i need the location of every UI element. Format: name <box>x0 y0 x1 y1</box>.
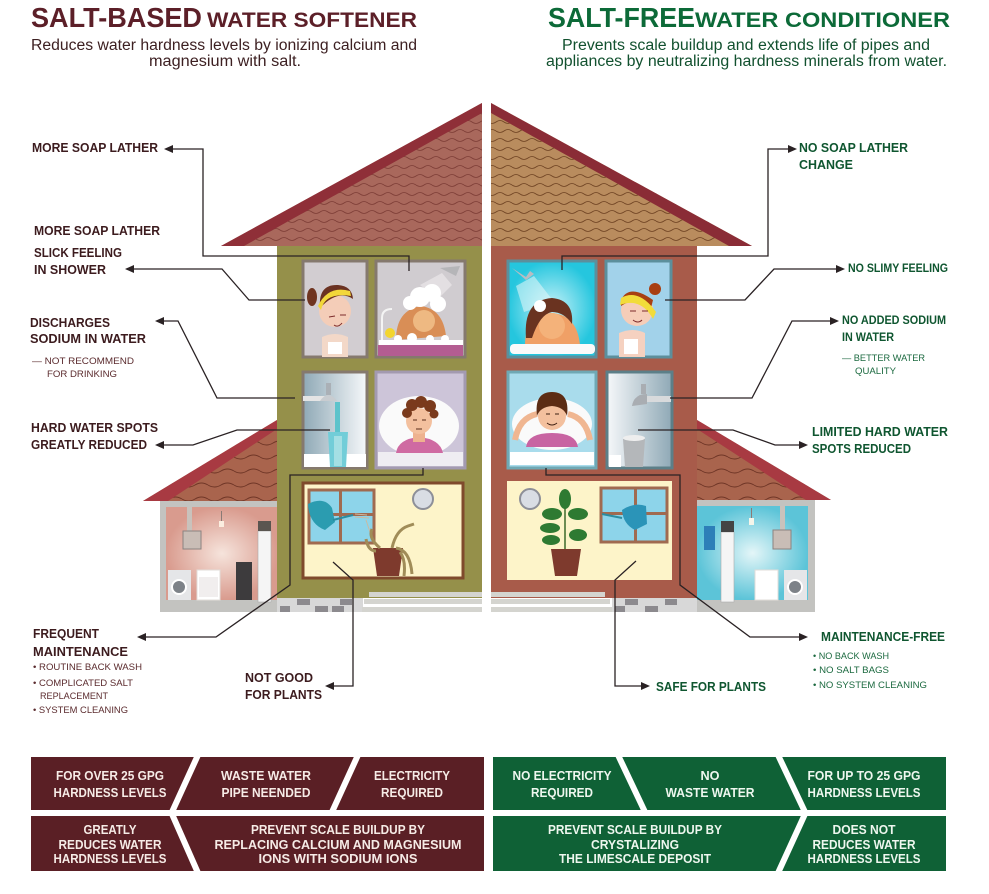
side annex roof right <box>697 420 831 500</box>
labels: salt-free: NO SLIMY FEELING <box>848 263 948 275</box>
banner: salt-based comparison: REPLACING CALCIUM AND MAGNESIUM <box>214 837 462 852</box>
house: salt-free side <box>491 103 831 612</box>
lower room: dying plant <box>303 483 463 578</box>
arrowheads: salt-based <box>125 145 334 690</box>
banner: salt-free comparison: NO <box>700 768 720 783</box>
subtitle: salt-based description: magnesium with salt. <box>149 53 301 70</box>
banner: salt-based comparison: IONS WITH SODIUM IONS <box>258 851 418 866</box>
labels: salt-free: SPOTS REDUCED <box>812 442 911 456</box>
banner: salt-free comparison <box>493 755 946 873</box>
labels: salt-based: MAINTENANCE <box>33 645 128 659</box>
banner: salt-free comparison: REDUCES WATER <box>812 837 916 852</box>
utility room right <box>695 500 815 612</box>
brown wall <box>491 246 697 598</box>
title: salt-based heading <box>31 2 417 33</box>
window: girl with slick skin <box>303 261 367 357</box>
labels: salt-based: GREATLY REDUCED <box>31 438 147 452</box>
labels: salt-free: • NO SYSTEM CLEANING <box>813 680 927 691</box>
labels: salt-free: • NO BACK WASH <box>813 651 889 662</box>
labels: salt-based: HARD WATER SPOTS <box>31 421 158 435</box>
labels: salt-free <box>656 141 948 694</box>
leader lines: salt-free <box>546 149 837 686</box>
title: salt-free heading: SALT-FREE <box>548 2 695 33</box>
banner: salt-free comparison: DOES NOT <box>832 822 896 837</box>
window: bath with foam <box>376 261 465 357</box>
labels: salt-based: MORE SOAP LATHER <box>32 141 158 155</box>
labels: salt-free: CHANGE <box>799 158 853 172</box>
labels: salt-based: • COMPLICATED SALT <box>33 678 133 689</box>
window: happy boy <box>508 372 596 468</box>
subtitle: salt-free description: appliances by neutralizing hardness minerals from water. <box>546 53 947 70</box>
subtitle: salt-based description: Reduces water hardness levels by ionizing calcium and <box>31 37 417 54</box>
labels: salt-free: QUALITY <box>855 366 897 377</box>
banner: salt-free comparison: HARDNESS LEVELS <box>808 851 921 866</box>
subtitle: salt-free description: Prevents scale buildup and extends life of pipes and <box>562 37 930 54</box>
labels: salt-based: • ROUTINE BACK WASH <box>33 662 142 673</box>
banner: salt-free comparison: THE LIMESCALE DEPOSIT <box>559 851 711 866</box>
side annex roof left <box>143 420 277 501</box>
banner: salt-based comparison: ELECTRICITY <box>374 768 450 783</box>
title: salt-based heading: WATER SOFTENER <box>207 9 417 32</box>
steps and paving left <box>277 592 482 612</box>
labels: salt-based: — NOT RECOMMEND <box>32 356 134 367</box>
banner: salt-free comparison: CRYSTALIZING <box>591 837 679 852</box>
banner: salt-based comparison: REDUCES WATER <box>58 837 162 852</box>
labels: salt-based: FOR DRINKING <box>47 369 117 380</box>
labels: salt-free: NO SOAP LATHER <box>799 141 908 155</box>
banner: salt-free comparison: REQUIRED <box>531 785 593 800</box>
labels: salt-free: • NO SALT BAGS <box>813 665 889 676</box>
labels: salt-based: REPLACEMENT <box>40 691 108 702</box>
title: salt-based heading: SALT-BASED <box>31 2 202 33</box>
banner: salt-based comparison: WASTE WATER <box>221 768 312 783</box>
banner: salt-free comparison: PREVENT SCALE BUILDUP BY <box>548 822 722 837</box>
window: tap and glass <box>303 372 367 468</box>
labels: salt-based <box>30 141 322 716</box>
labels: salt-based: SLICK FEELING <box>34 246 122 260</box>
labels: salt-based: IN SHOWER <box>34 263 106 277</box>
title: salt-free heading <box>548 2 950 33</box>
window: tired boy <box>376 372 465 468</box>
labels: salt-based: FOR PLANTS <box>245 688 322 702</box>
banner: salt-based comparison: HARDNESS LEVELS <box>54 851 167 866</box>
title: salt-free heading: WATER CONDITIONER <box>695 9 950 32</box>
lower room: healthy plant <box>507 481 672 580</box>
labels: salt-based: • SYSTEM CLEANING <box>33 705 128 716</box>
labels: salt-free: IN WATER <box>842 332 895 344</box>
steps and paving right <box>491 592 697 612</box>
olive wall <box>277 246 482 598</box>
labels: salt-based: FREQUENT <box>33 627 99 641</box>
subtitle: salt-free description <box>546 37 947 70</box>
window: happy girl <box>606 261 671 357</box>
window: shower <box>508 261 596 357</box>
labels: salt-free: LIMITED HARD WATER <box>812 425 948 439</box>
banner: salt-free comparison: NO ELECTRICITY <box>512 768 612 783</box>
banner: salt-based comparison: PIPE NEENDED <box>222 785 310 800</box>
labels: salt-free: MAINTENANCE-FREE <box>821 630 945 644</box>
arrowheads: salt-free <box>641 145 845 690</box>
house: salt-based side <box>143 103 482 612</box>
labels: salt-based: NOT GOOD <box>245 671 313 685</box>
leader lines: salt-based <box>133 149 423 686</box>
utility room left <box>160 501 280 612</box>
banner: salt-based comparison: REQUIRED <box>381 785 443 800</box>
labels: salt-based: SODIUM IN WATER <box>30 332 146 346</box>
banner: salt-free comparison: HARDNESS LEVELS <box>808 785 921 800</box>
banner: salt-based comparison: PREVENT SCALE BUILDUP BY <box>251 822 425 837</box>
window: tap and bucket <box>607 372 672 468</box>
labels: salt-free: SAFE FOR PLANTS <box>656 680 766 694</box>
banner: salt-based comparison: FOR OVER 25 GPG <box>56 768 164 783</box>
banner: salt-based comparison: GREATLY <box>84 822 137 837</box>
labels: salt-based: DISCHARGES <box>30 316 110 330</box>
subtitle: salt-based description <box>31 37 417 70</box>
main roof right <box>491 103 752 246</box>
labels: salt-free: NO ADDED SODIUM <box>842 315 946 327</box>
banner: salt-free comparison: FOR UP TO 25 GPG <box>808 768 920 783</box>
labels: salt-based: MORE SOAP LATHER <box>34 224 160 238</box>
banner: salt-based comparison <box>31 755 484 873</box>
banner: salt-based comparison: HARDNESS LEVELS <box>54 785 167 800</box>
main roof left <box>221 103 482 246</box>
labels: salt-free: — BETTER WATER <box>842 353 925 364</box>
banner: salt-free comparison: WASTE WATER <box>666 785 755 800</box>
